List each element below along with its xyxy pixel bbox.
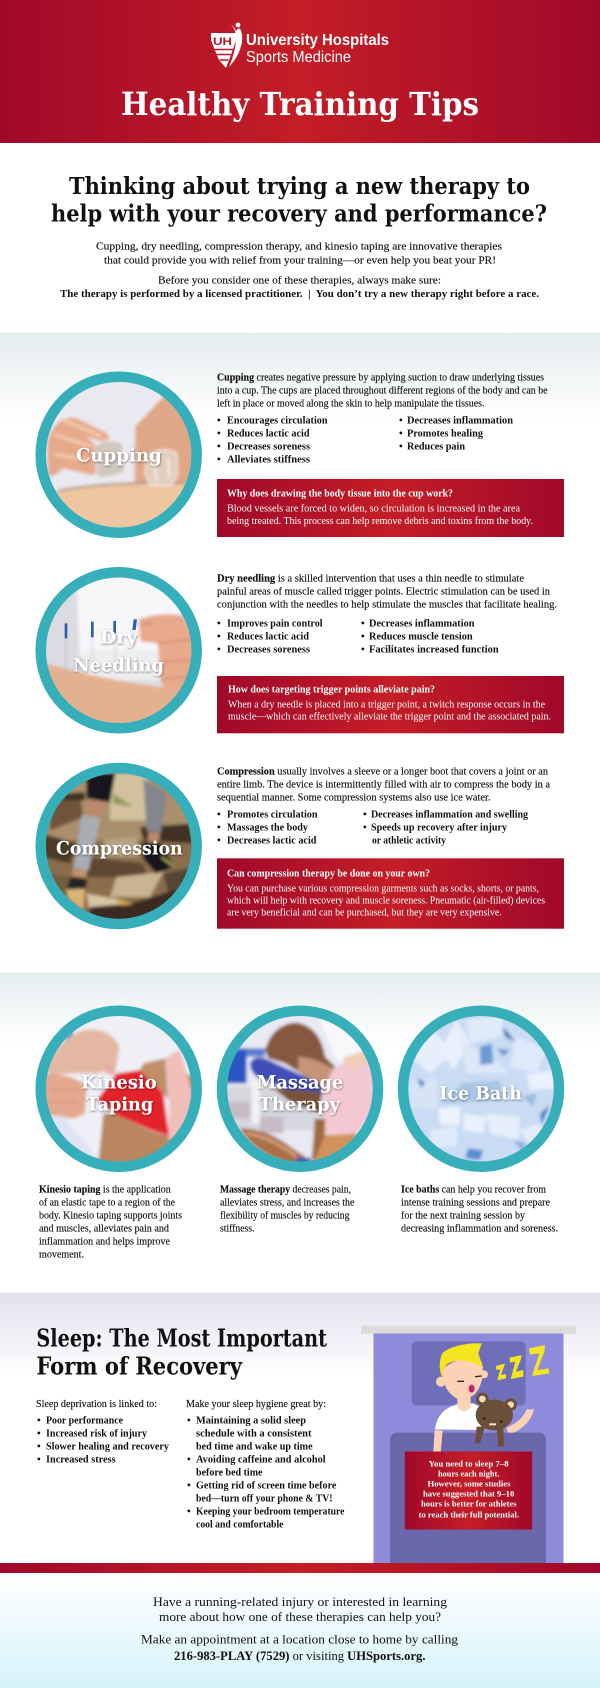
text: dry needling description: Dry needling is a skilled intervention that uses a thin needle to stimulate — [217, 574, 524, 585]
label: Massage — [257, 1072, 343, 1093]
text: dry needling description: conjunction with the needles to help stimulate the muscles that facilitate healing. — [217, 600, 557, 611]
photo: ice — [398, 1006, 564, 1172]
list: sleep hygiene: Maintaining a solid sleep — [196, 1416, 306, 1427]
list: cupping benefits: • — [399, 429, 403, 440]
list: dry needling benefits: Decreases soreness — [227, 645, 310, 656]
panel: compression — [30, 757, 564, 937]
label: Ice Bath — [439, 1083, 523, 1104]
label — [73, 627, 164, 677]
icon: UH shield — [211, 23, 242, 68]
list: cupping benefits — [217, 415, 513, 466]
list: dry needling benefits: Facilitates increased function — [369, 645, 499, 656]
footer background — [0, 1573, 600, 1688]
callout: cupping question — [217, 479, 564, 537]
label: Needling — [73, 656, 164, 677]
list: dry needling benefits: • — [217, 645, 221, 656]
text: dry needling description — [217, 574, 557, 611]
intro text: Cupping, dry needling, compression therapy, and kinesio taping are innovative therapies — [96, 240, 502, 252]
list: cupping benefits: Reduces lactic acid — [227, 429, 310, 440]
text: massage therapy — [220, 1185, 355, 1235]
list: compression benefits: Decreases lactic acid — [227, 836, 317, 847]
footer: call to action: 216-983-PLAY (7529) or visiting UHSports.org. — [174, 1648, 426, 1663]
list: compression benefits — [217, 810, 529, 847]
text: ice bath: intense training sessions and prepare — [401, 1198, 550, 1209]
list: dry needling benefits: • — [361, 632, 365, 643]
label — [257, 1072, 343, 1116]
intro text — [60, 240, 539, 300]
text: compression description: Compression usually involves a sleeve or a longer boot that covers a joint or an — [217, 767, 549, 778]
list: dry needling benefits: • — [361, 619, 365, 630]
callout: cupping question: Why does drawing the body tissue into the cup work? — [227, 489, 453, 500]
callout: sleep hours: However, some studies — [428, 1479, 511, 1489]
text: massage therapy: flexibility of muscles by reducing — [220, 1211, 350, 1222]
text: kinesio taping: and muscles, alleviates pain and — [39, 1224, 170, 1235]
panel: dry needling — [30, 560, 564, 740]
panel: sleep — [36, 1324, 576, 1564]
list: dry needling benefits: Reduces muscle tension — [369, 632, 473, 643]
header banner — [0, 0, 600, 143]
ring — [41, 1011, 197, 1167]
footer: call to action: more about how one of these therapies can help you? — [159, 1609, 441, 1624]
callout: compression question: Can compression therapy be done on your own? — [227, 869, 430, 880]
callout: compression question: which will help with recovery and muscle soreness. Pneumatic (air-filled) devices — [227, 896, 545, 907]
logo — [211, 23, 389, 68]
label: Kinesio — [81, 1072, 157, 1093]
callout: cupping question: Blood vessels are forced to widen, so circulation is increased in the area — [227, 504, 520, 515]
list: compression benefits: Speeds up recovery after injury — [371, 823, 508, 834]
logo: University Hospitals — [246, 32, 389, 49]
text: kinesio taping: inflammation and helps improve — [39, 1237, 170, 1248]
text: massage therapy: alleviates stress, and increases the — [220, 1198, 355, 1209]
label: Compression — [56, 838, 183, 859]
list: sleep hygiene: Avoiding caffeine and alcohol — [196, 1455, 326, 1466]
photo: cupping — [35, 372, 202, 538]
list: sleep hygiene: • — [187, 1455, 191, 1466]
list: compression benefits: • — [363, 810, 367, 821]
callout: cupping question: being treated. This process can help remove debris and toxins from the body. — [227, 516, 533, 527]
ring — [41, 572, 197, 728]
boy — [435, 1343, 534, 1435]
text: massage therapy: stiffness. — [220, 1224, 254, 1235]
list: sleep hygiene: before bed time — [196, 1468, 263, 1479]
list: cupping benefits: • — [217, 429, 221, 440]
callout: compression question: are very beneficial and can be purchased, but they are very expensive. — [227, 908, 502, 919]
intro text: The therapy is performed by a licensed practitioner. | You don’t try a new therapy right before a race. — [60, 288, 539, 300]
list: sleep hygiene: bed time and wake up time — [196, 1442, 313, 1453]
list: compression benefits: Promotes circulation — [227, 810, 318, 821]
text: kinesio taping: movement. — [39, 1250, 84, 1261]
list: cupping benefits: • — [399, 442, 403, 453]
text: massage therapy: Massage therapy decreases pain, — [220, 1185, 351, 1196]
list: dry needling benefits: • — [217, 619, 221, 630]
list: dry needling benefits: Decreases inflammation — [369, 619, 475, 630]
heading: sleep: Sleep: The Most Important — [36, 1324, 327, 1353]
ring — [41, 768, 197, 924]
list: sleep hygiene: Make your sleep hygiene great by: — [186, 1399, 326, 1410]
list: cupping benefits: Decreases soreness — [227, 442, 310, 453]
list: cupping benefits: Promotes healing — [407, 429, 484, 440]
text: cupping description — [217, 373, 548, 410]
list: sleep hygiene: Keeping your bedroom temperature — [196, 1507, 345, 1518]
heading: sleep: Form of Recovery — [36, 1351, 243, 1380]
list: sleep deprivation: Increased stress — [46, 1455, 116, 1466]
panel: kinesio taping — [35, 1006, 202, 1258]
title: Healthy Training Tips — [121, 86, 479, 123]
callout: compression question — [217, 858, 564, 929]
ring — [222, 1011, 378, 1167]
text: kinesio taping: body. Kinesio taping supports joints — [39, 1211, 182, 1222]
list: sleep hygiene: cool and comfortable — [196, 1520, 284, 1531]
callout: dry needling question — [217, 676, 564, 733]
callout: sleep hours: have suggested that 9–10 — [423, 1489, 515, 1499]
label: Dry — [100, 627, 139, 648]
list: compression benefits: Decreases inflammation and swelling — [371, 810, 529, 821]
icon: UH shield: UH — [213, 36, 232, 48]
illustration: sleeping boy in bed — [361, 1326, 576, 1564]
panel: cupping — [30, 365, 564, 545]
list: sleep hygiene: Getting rid of screen time before — [196, 1481, 337, 1492]
list: dry needling benefits: Reduces lactic acid — [227, 632, 309, 643]
teddy bear — [475, 1393, 517, 1447]
footer: call to action: Make an appointment at a location close to home by calling — [141, 1631, 459, 1646]
text: cupping description: into a cup. The cups are placed throughout different regions of the body and can be — [217, 386, 548, 397]
text: kinesio taping: of an elastic tape to a region of the — [39, 1198, 175, 1209]
text: cupping description: Cupping creates negative pressure by applying suction to draw underlying tissues — [217, 373, 544, 384]
text: compression description: entire limb. The device is intermittently filled with air to compress the body in a — [217, 780, 550, 791]
list: cupping benefits: Encourages circulation — [227, 415, 328, 426]
needle tips — [65, 619, 137, 638]
label: Therapy — [259, 1095, 341, 1116]
panel background: sleep — [0, 1293, 600, 1378]
list: cupping benefits: Reduces pain — [407, 442, 465, 453]
heading: new therapy question — [51, 172, 547, 228]
list: cupping benefits: • — [217, 455, 221, 466]
list: sleep hygiene: • — [187, 1507, 191, 1518]
footer: call to action — [141, 1594, 459, 1663]
photo: massage therapy — [216, 1006, 384, 1172]
callout: dry needling question: When a dry needle is placed into a trigger point, a twitch response occurs in the — [228, 700, 545, 711]
list: compression benefits: • — [217, 810, 221, 821]
text: ice bath: Ice baths can help you recover from — [401, 1185, 547, 1196]
list: sleep deprivation: Increased risk of injury — [46, 1429, 148, 1440]
intro text: that could provide you with relief from your training—or even help you beat your PR! — [104, 254, 496, 266]
callout: sleep hours — [405, 1452, 532, 1529]
list: sleep hygiene: bed—turn off your phone & TV! — [196, 1494, 332, 1505]
panel background: additional therapies — [0, 973, 600, 1045]
list: sleep deprivation: Slower healing and recovery — [46, 1442, 170, 1453]
list: cupping benefits: • — [217, 415, 221, 426]
photo: dry needling — [35, 567, 202, 734]
callout: sleep hours: You need to sleep 7–8 — [429, 1459, 509, 1469]
list: sleep hygiene: schedule with a consistent — [196, 1429, 312, 1440]
footer: call to action: Have a running-related injury or interested in learning — [153, 1594, 448, 1609]
text: compression description: sequential manner. Some compression systems also use ice water. — [217, 793, 490, 804]
list: compression benefits: • — [363, 823, 367, 834]
divider: red bar — [0, 1563, 600, 1573]
text: ice bath: decreasing inflammation and soreness. — [401, 1224, 558, 1235]
text: ice bath: for the next training session by — [401, 1211, 526, 1222]
list: sleep deprivation: • — [37, 1416, 41, 1427]
list: sleep hygiene: • — [187, 1481, 191, 1492]
list: cupping benefits: Alleviates stiffness — [227, 455, 310, 466]
callout: sleep hours: hours is better for athletes — [421, 1499, 517, 1509]
text: dry needling description: painful areas of muscle called trigger points. Electric stimulation can be used in — [217, 587, 551, 598]
text: kinesio taping: Kinesio taping is the application — [39, 1185, 171, 1196]
list: cupping benefits: • — [217, 442, 221, 453]
text: kinesio taping — [39, 1185, 182, 1261]
list: compression benefits: • — [217, 836, 221, 847]
label — [81, 1072, 157, 1116]
list: cupping benefits: Decreases inflammation — [407, 415, 513, 426]
list: sleep deprivation: • — [37, 1442, 41, 1453]
list: sleep deprivation: • — [37, 1455, 41, 1466]
label: Taping — [86, 1095, 153, 1116]
list: dry needling benefits: • — [217, 632, 221, 643]
list: compression benefits: • — [217, 823, 221, 834]
heading: new therapy question: Thinking about trying a new therapy to — [69, 172, 530, 200]
ring — [403, 1011, 559, 1167]
list: sleep deprivation: Poor performance — [46, 1416, 123, 1427]
callout: compression question: You can purchase various compression garments such as socks, shorts, or pants, — [227, 884, 539, 895]
label: Cupping — [76, 446, 162, 467]
heading: new therapy question: help with your recovery and performance? — [51, 200, 547, 228]
list: cupping benefits: • — [399, 415, 403, 426]
panel background: therapies — [0, 333, 600, 420]
photo: compression — [35, 762, 202, 930]
list: sleep deprivation — [36, 1399, 170, 1466]
list: sleep deprivation: • — [37, 1429, 41, 1440]
callout: sleep hours: to reach their full potential. — [419, 1510, 519, 1520]
panel: massage therapy — [216, 1006, 384, 1232]
list: dry needling benefits: Improves pain control — [227, 619, 323, 630]
list: dry needling benefits — [217, 619, 499, 656]
callout: dry needling question: How does targeting trigger points alleviate pain? — [228, 685, 435, 696]
panel: ice bath — [390, 1000, 570, 1235]
intro text: Before you consider one of these therapies, always make sure: — [158, 274, 441, 286]
photo: kinesio taping — [35, 1006, 202, 1172]
text: cupping description: left in place or moved along the skin to help manipulate the tissues. — [217, 399, 484, 410]
callout: dry needling question: muscle—which can effectively alleviate the trigger point and the associated pain. — [228, 712, 551, 723]
list: sleep hygiene — [186, 1399, 345, 1531]
text: compression description — [217, 767, 550, 804]
list: sleep hygiene: • — [187, 1416, 191, 1427]
list: compression benefits: or athletic activity — [372, 836, 447, 847]
list: dry needling benefits: • — [361, 645, 365, 656]
zzz — [496, 1345, 549, 1380]
callout: sleep hours: hours each night. — [438, 1469, 499, 1479]
logo: Sports Medicine — [246, 49, 351, 66]
list: compression benefits: Massages the body — [227, 823, 309, 834]
text: ice bath — [401, 1185, 558, 1235]
heading: sleep — [36, 1324, 327, 1380]
ring — [41, 377, 197, 533]
list: sleep deprivation: Sleep deprivation is linked to: — [36, 1399, 157, 1410]
